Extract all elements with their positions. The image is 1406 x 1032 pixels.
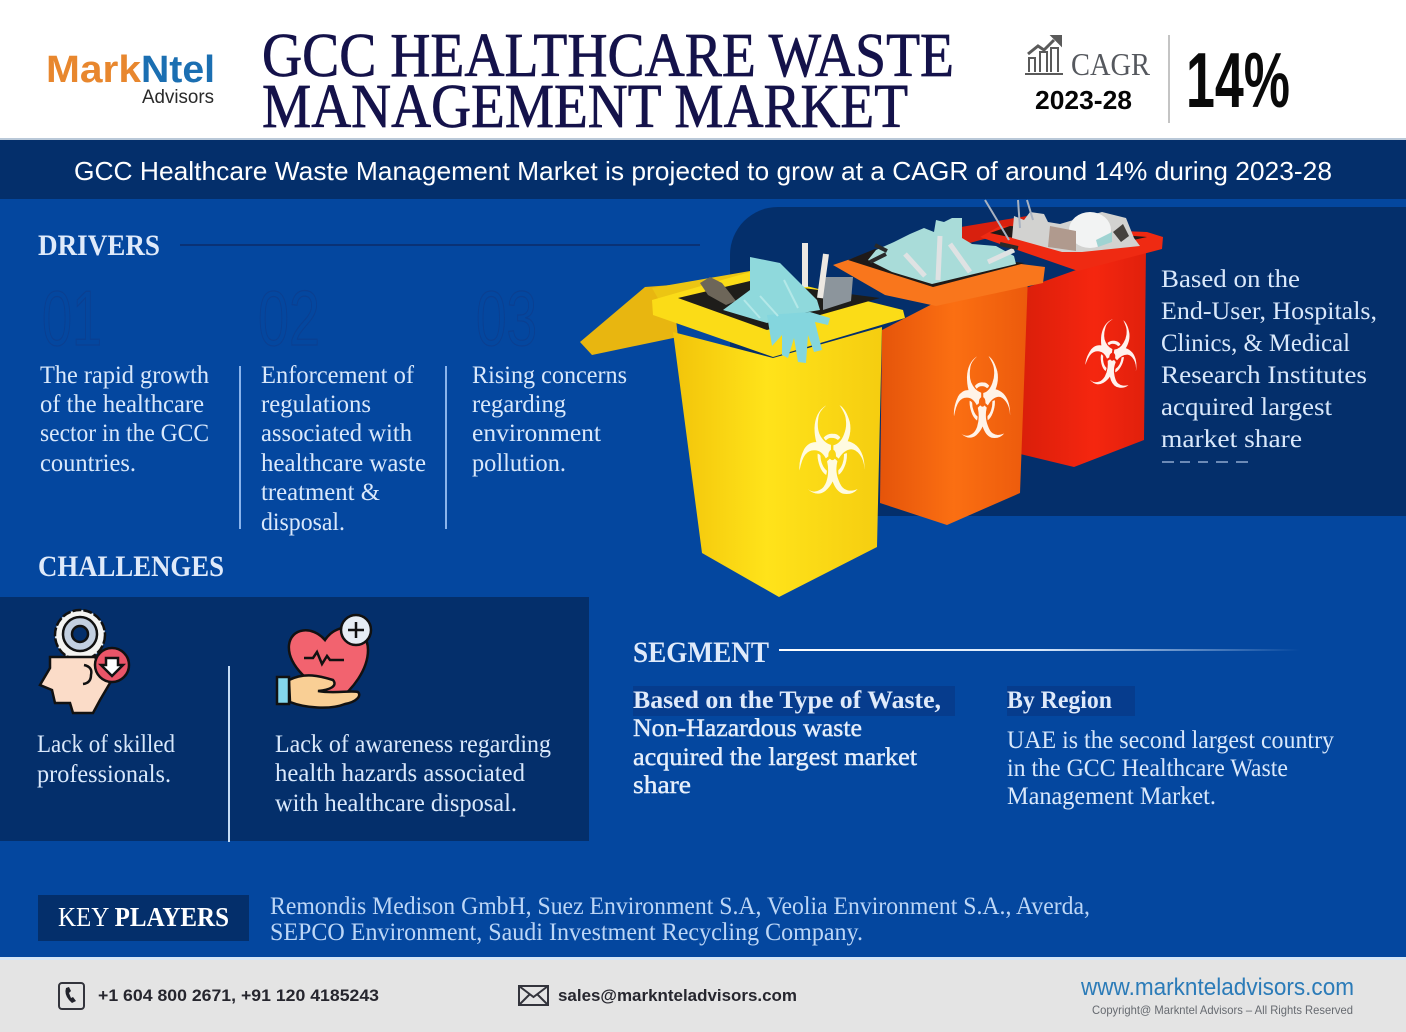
driver 01: The rapid growth xyxy=(40,362,209,389)
key players label: KEY PLAYERS xyxy=(58,902,229,932)
driver 02: healthcare waste xyxy=(261,450,426,477)
segment heading: SEGMENT xyxy=(633,636,769,669)
end-user text: Based on the xyxy=(1161,266,1300,293)
icon: phone xyxy=(59,983,84,1009)
red bin: ☣ xyxy=(1077,297,1148,412)
key players xyxy=(38,893,1090,946)
red bin xyxy=(955,200,1163,467)
driver 03: 03 xyxy=(476,274,537,362)
driver 02: Enforcement of xyxy=(261,362,415,389)
CAGR value: 14% xyxy=(1186,36,1290,124)
panel: challenges xyxy=(0,597,589,842)
illustration: medical waste bins xyxy=(580,200,1163,597)
segment: by region: Management Market. xyxy=(1007,783,1216,810)
website: www.marknteladvisors.com xyxy=(1080,974,1354,1001)
email: sales@marknteladvisors.com xyxy=(558,986,797,1005)
panel: end-user finding xyxy=(730,207,1406,516)
driver 03 xyxy=(472,274,627,477)
driver 01 xyxy=(40,274,209,477)
driver 01: of the healthcare xyxy=(40,391,204,418)
segment: type of waste: Non-Hazardous waste xyxy=(633,715,862,742)
driver 02: regulations xyxy=(261,391,371,418)
driver 02: disposal. xyxy=(261,509,345,536)
driver 02: 02 xyxy=(258,274,320,362)
challenge: awareness xyxy=(275,731,551,817)
driver 02: treatment & xyxy=(261,479,380,506)
yellow bin xyxy=(580,243,905,597)
driver 03: regarding xyxy=(472,391,566,418)
segment: type of waste: acquired the largest market xyxy=(633,744,917,771)
segment: by region: By Region xyxy=(1007,687,1112,714)
icon: mail xyxy=(519,986,548,1005)
CAGR label: CAGR xyxy=(1071,46,1151,82)
segment: by region: in the GCC Healthcare Waste xyxy=(1007,755,1288,782)
panel: drivers xyxy=(38,229,700,536)
phone numbers: +1 604 800 2671, +91 120 4185243 xyxy=(98,986,379,1005)
segment: type of waste: share xyxy=(633,772,691,799)
segment: by region: UAE is the second largest country xyxy=(1007,727,1334,754)
header xyxy=(0,0,1406,141)
yellow bin: ☣ xyxy=(795,382,869,523)
key players list xyxy=(270,893,1090,946)
challenge: awareness: with healthcare disposal. xyxy=(275,790,517,817)
logo xyxy=(46,49,215,108)
driver 03: Rising concerns xyxy=(472,362,627,389)
logo: Mark xyxy=(46,49,142,91)
end-user text: market share xyxy=(1161,426,1302,453)
title xyxy=(262,22,954,141)
drivers heading: DRIVERS xyxy=(38,229,160,262)
title: MANAGEMENT MARKET xyxy=(262,73,908,141)
driver 01: countries. xyxy=(40,450,136,477)
panel: segment xyxy=(633,636,1334,810)
icon: CAGR growth chart xyxy=(1025,36,1063,74)
icon: head with gear xyxy=(40,610,129,713)
orange bin xyxy=(833,218,1045,525)
end-user text: End-User, Hospitals, xyxy=(1161,298,1377,325)
subtitle band xyxy=(0,140,1406,199)
copyright: Copyright@ Markntel Advisors – All Rights Reserved xyxy=(1092,1003,1353,1017)
end-user text: acquired largest xyxy=(1161,394,1332,421)
challenge: skilled professionals: professionals. xyxy=(37,761,171,788)
driver 01: sector in the GCC xyxy=(40,420,209,447)
driver 02: associated with xyxy=(261,420,412,447)
challenge: awareness: health hazards associated xyxy=(275,760,525,787)
challenges heading: CHALLENGES xyxy=(38,550,224,583)
driver 03: pollution. xyxy=(472,450,566,477)
footer xyxy=(0,957,1406,1032)
logo: Advisors xyxy=(142,87,214,108)
driver 03: environment xyxy=(472,420,601,447)
title: GCC HEALTHCARE WASTE xyxy=(262,22,954,90)
challenge: skilled professionals: Lack of skilled xyxy=(37,731,175,758)
key players label xyxy=(38,895,249,941)
driver 02 xyxy=(258,274,426,536)
driver 01: 01 xyxy=(42,274,102,362)
challenge: awareness: Lack of awareness regarding xyxy=(275,731,551,758)
key players list: SEPCO Environment, Saudi Investment Recycling Company. xyxy=(270,919,863,946)
segment: type of waste: Based on the Type of Waste, xyxy=(633,687,941,714)
segment: by region xyxy=(1007,686,1334,810)
segment: type of waste xyxy=(633,686,955,799)
orange bin: ☣ xyxy=(950,335,1014,466)
key players list: Remondis Medison GmbH, Suez Environment S.A, Veolia Environment S.A., Averda, xyxy=(270,893,1090,920)
CAGR period: 2023-28 xyxy=(1035,85,1132,115)
end-user text: Clinics, & Medical xyxy=(1161,330,1350,357)
end-user text: Research Institutes xyxy=(1161,362,1367,389)
icon: heart in hand xyxy=(277,615,371,708)
subtitle band: GCC Healthcare Waste Management Market is projected to grow at a CAGR of around 14% during 2023-28 xyxy=(74,156,1332,186)
logo: Ntel xyxy=(141,49,215,91)
challenge: skilled professionals xyxy=(37,731,175,788)
end-user text xyxy=(1161,266,1377,453)
